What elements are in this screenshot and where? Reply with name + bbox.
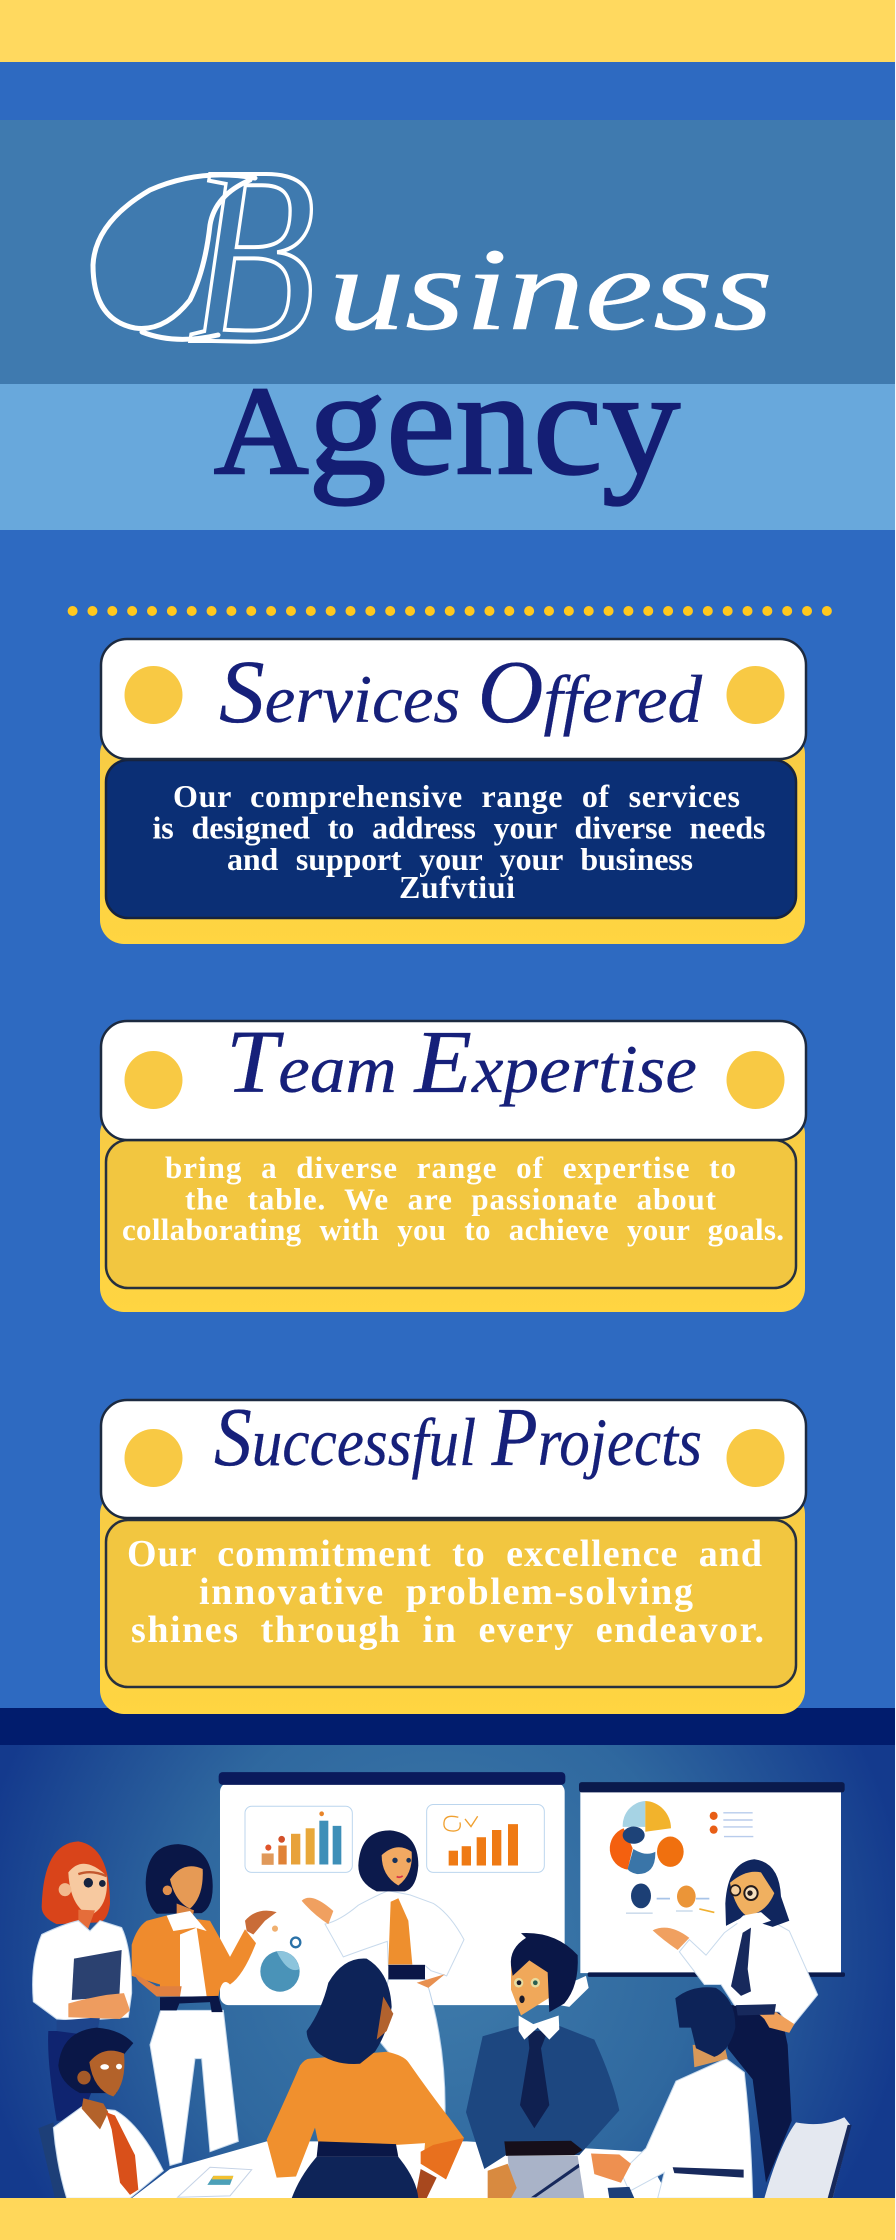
description: Our comprehensive range of services: [173, 778, 740, 814]
description: bring a diverse range of expertise to: [165, 1150, 736, 1185]
yellow card base: [100, 1110, 805, 1312]
description: is designed to address your diverse needs: [152, 810, 766, 846]
pie chart cluster: [610, 1801, 753, 1913]
description: [122, 1150, 784, 1247]
person: woman in orange jacket: [132, 1844, 277, 2166]
description: collaborating with you to achieve your goals.: [122, 1212, 784, 1247]
subtitle: Agency: Agency: [214, 340, 680, 506]
bottom yellow band: [0, 2198, 896, 2240]
right page edge: [895, 0, 896, 2240]
top yellow band: [0, 0, 896, 62]
description: [127, 1533, 764, 1651]
person: seated man: [38, 2028, 163, 2198]
title band: [0, 120, 896, 384]
title: Business: usiness: [328, 224, 773, 355]
icon: left dot: [124, 1051, 182, 1109]
laptop: [508, 2156, 584, 2198]
heading card: [101, 1400, 806, 1518]
description: and support your your business: [227, 841, 693, 877]
illustration background: [0, 1745, 896, 2198]
icon: right dot: [726, 666, 784, 724]
description: innovative problem-solving: [199, 1571, 693, 1613]
panel: successful projects: [100, 1391, 806, 1714]
document: [178, 2167, 252, 2197]
icon: right dot: [726, 1051, 784, 1109]
title: Business: B: [188, 115, 316, 397]
panel: services offered: [100, 639, 806, 944]
heading card: [101, 639, 806, 759]
person: woman seen from behind: [267, 1959, 464, 2198]
heading: Services Offered: [219, 643, 703, 742]
heading: Team Expertise: [226, 1013, 697, 1112]
table: [132, 2141, 670, 2198]
description: shines through in every endeavor.: [131, 1609, 764, 1651]
icon: right dot: [726, 1429, 784, 1487]
description: the table. We are passionate about: [185, 1182, 717, 1216]
whiteboard: pie charts: [579, 1782, 845, 1977]
yellow card base: [100, 1490, 805, 1714]
person: man in blue suit: [466, 1933, 619, 2198]
description panel: [106, 1520, 796, 1687]
pie detail: [260, 1926, 300, 1992]
tablet: [72, 1950, 122, 2000]
person: woman with red hair: [33, 1841, 132, 2121]
description: Our commitment to excellence and: [127, 1533, 762, 1575]
description panel: [106, 760, 796, 918]
chair: [764, 2117, 852, 2198]
icon: left dot: [124, 1429, 182, 1487]
title flourish: [93, 175, 255, 339]
description: [152, 778, 766, 905]
heading card: [101, 1021, 806, 1140]
panel: team expertise: [100, 1013, 806, 1312]
illustration: team meeting: [0, 1745, 896, 2198]
bar chart: mixed: [245, 1806, 352, 1872]
icon: left dot: [124, 666, 182, 724]
dark band behind illustration: [0, 1708, 896, 1745]
dotted divider: [73, 606, 830, 616]
description: Zufvtiui: [399, 869, 515, 905]
whiteboard: bar charts: [219, 1772, 565, 2005]
heading: Successful Projects: [214, 1391, 702, 1484]
person: right presenter: [653, 1859, 818, 2183]
person: man seen from behind: [591, 1987, 753, 2198]
bar chart: orange: [427, 1804, 544, 1872]
subtitle band: [0, 384, 896, 530]
yellow card base: [100, 730, 805, 944]
person: centre presenter: [302, 1830, 464, 2117]
description panel: [106, 1140, 796, 1288]
